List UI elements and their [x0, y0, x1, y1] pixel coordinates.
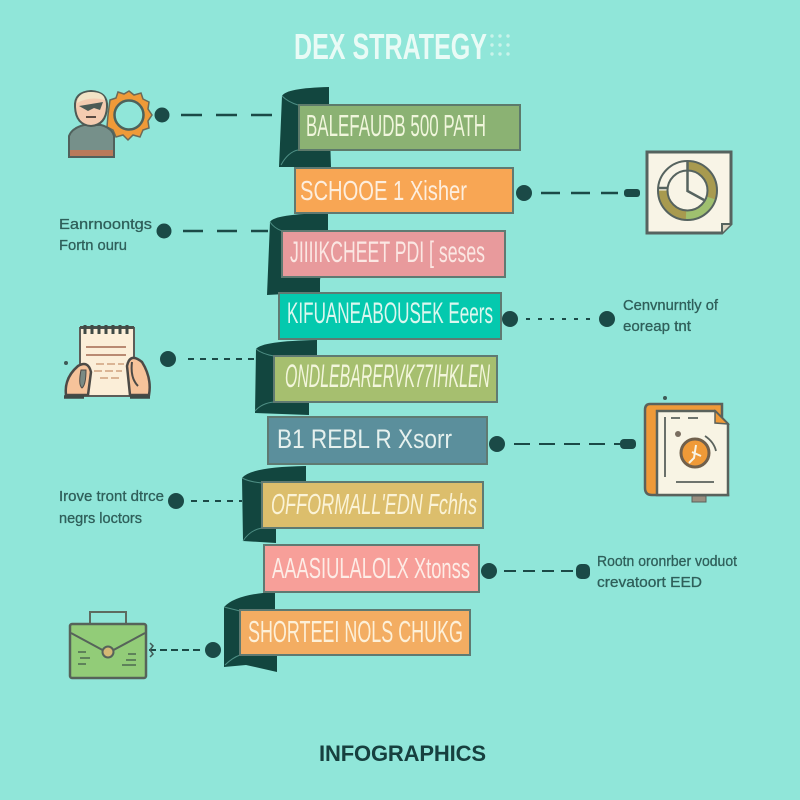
connector 4	[502, 311, 615, 327]
connector 9	[149, 642, 221, 658]
ribbon connectors	[224, 87, 331, 672]
bar 2	[295, 168, 513, 213]
bar 5	[274, 356, 497, 402]
bar 1	[299, 105, 520, 150]
left caption 1	[59, 216, 152, 254]
left caption 2: negrs loctors	[59, 510, 142, 527]
connector 2	[516, 185, 640, 201]
icon: orange folder with document	[645, 396, 728, 502]
left caption 1: Fortn ouru	[59, 237, 127, 254]
right caption 2: crevatoort EED	[597, 574, 702, 591]
right caption 2	[597, 553, 738, 591]
icon: clock chart card	[647, 152, 731, 233]
bar 3	[282, 231, 505, 277]
icon: green briefcase	[70, 612, 153, 678]
bar 2: SCHOOE 1 Xisher	[300, 175, 467, 206]
bar 6: B1 REBL R Xsorr	[277, 424, 452, 454]
bar 8	[264, 545, 479, 592]
bar 3: JIIIIKCHEET PDI [ seses	[290, 236, 485, 269]
bar 7	[262, 482, 483, 528]
connector 1	[154, 108, 281, 122]
left caption 2: Irove tront dtrce	[59, 488, 164, 505]
right caption 1: Cenvnurntly of	[623, 297, 719, 314]
bar 4	[279, 293, 501, 339]
title: DEX STRATEGY	[294, 26, 487, 67]
bar 9	[240, 610, 470, 655]
left caption 1: Eanrnoontgs	[59, 216, 152, 233]
bar 8: AAASIULALOLX Xtonss	[272, 553, 470, 585]
left caption 2	[59, 488, 164, 527]
connector 6	[489, 436, 636, 452]
icon: person with gear	[69, 91, 152, 157]
icon: notepad held by hands	[64, 325, 150, 397]
connector 7	[168, 493, 242, 509]
bar 6	[268, 417, 487, 464]
right caption 1	[623, 297, 719, 335]
footer label: INFOGRAPHICS	[319, 741, 486, 766]
bar 9: SHORTEEI NOLS CHUKG	[248, 614, 463, 649]
right caption 2: Rootn oronrber voduot	[597, 553, 738, 570]
bar 1: BALEFAUDB 500 PATH	[306, 108, 486, 143]
bar 5: ONDLEBARERVK77IHKLEN	[285, 358, 490, 394]
connector 3	[156, 224, 268, 238]
connector 8	[481, 563, 590, 579]
right caption 1: eoreap tnt	[623, 318, 692, 335]
bar 4: KIFUANEABOUSEK Eeers	[287, 297, 493, 330]
connector 5	[160, 351, 255, 367]
bar 7: OFFORMALL'EDN Fchhs	[271, 489, 477, 521]
